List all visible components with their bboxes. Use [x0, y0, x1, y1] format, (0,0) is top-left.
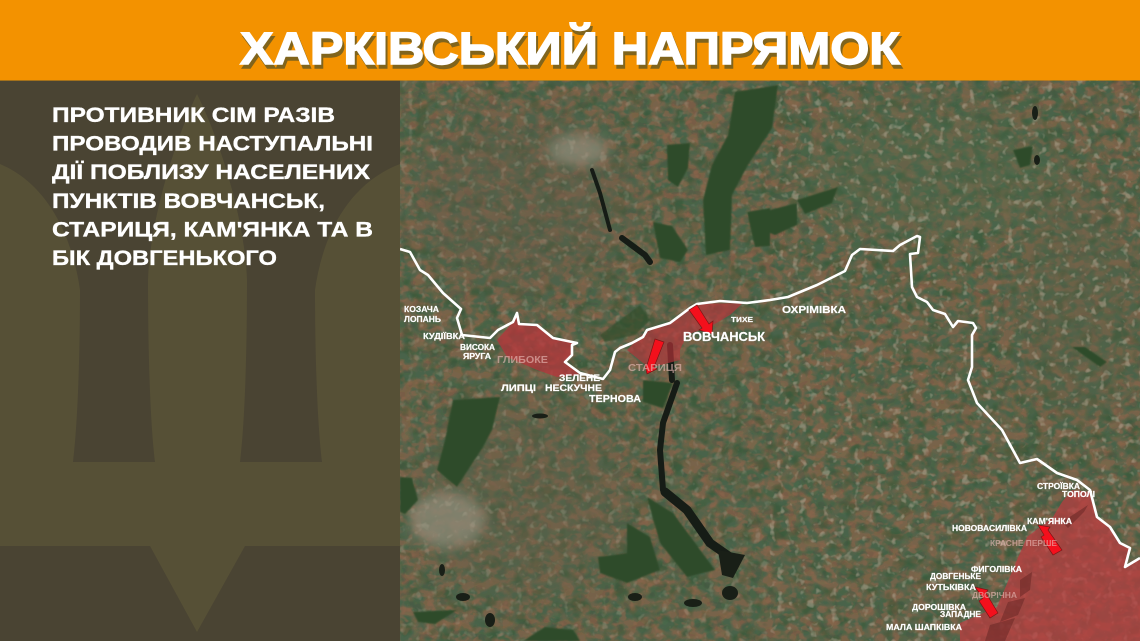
arrow: Vovchansk attack — [689, 305, 713, 334]
settlement labels: КОЗАЧА — [404, 305, 439, 314]
settlement labels: НОВОВАСИЛІВКА — [952, 523, 1027, 533]
title: ХАРКІВСЬКИЙ НАПРЯМОК — [242, 27, 903, 78]
front line — [400, 236, 1140, 567]
settlement labels: ТОПОЛІ — [1062, 490, 1095, 499]
occupied area: Vovchansk and Starytsia — [627, 303, 743, 367]
panel body text: ПРОВОДИВ НАСТУПАЛЬНІ — [52, 132, 373, 156]
settlement labels: ВОВЧАНСЬК — [683, 329, 765, 344]
arrow: Dvorichna attack — [975, 587, 998, 618]
panel: left text panel with trident — [0, 80, 400, 641]
settlement labels: ДВОРІЧНА — [972, 590, 1017, 600]
arrow: Kamianka attack — [1038, 525, 1062, 555]
settlement labels: НЕСКУЧНЕ — [545, 383, 602, 394]
settlement labels: ГЛИБОКЕ — [497, 355, 548, 366]
forests — [400, 85, 1107, 641]
occupied area: Kamianka to Dvorichna — [960, 490, 1140, 641]
settlement labels: КАМ'ЯНКА — [1027, 516, 1072, 526]
panel body text — [52, 104, 373, 270]
panel body text: ПРОТИВНИК СІМ РАЗІВ — [52, 104, 335, 127]
settlement labels: КУТЬКІВКА — [926, 582, 976, 592]
settlement labels: ЗЕЛЕНЕ — [559, 373, 600, 384]
settlement labels: ДОРОШІВКА — [912, 602, 966, 612]
settlement labels: ЛИПЦІ — [501, 383, 536, 394]
settlement labels: СТАРИЦЯ — [628, 363, 682, 374]
settlement labels: ДОВГЕНЬКЕ — [930, 571, 981, 581]
header bar — [0, 0, 1140, 80]
rivers and reservoirs — [592, 170, 730, 557]
settlement labels: ТЕРНОВА — [589, 393, 641, 405]
settlement labels: ВИСОКА — [460, 343, 495, 352]
settlement labels: ТИХЕ — [731, 315, 753, 324]
settlement labels: ОХРІМІВКА — [782, 305, 846, 316]
occupied area: Hlyboke — [497, 313, 580, 377]
cities — [409, 134, 608, 548]
panel body text: СТАРИЦЯ, КАМ'ЯНКА ТА В — [52, 218, 373, 242]
settlement labels: ЗАПАДНЕ — [940, 609, 981, 619]
settlement labels: ФИГОЛІВКА — [971, 564, 1022, 574]
panel body text: ПУНКТІВ ВОВЧАНСЬК, — [52, 190, 325, 213]
map background — [400, 80, 1140, 641]
arrow: Starytsia attack — [645, 339, 664, 374]
settlement labels: ЯРУГА — [463, 352, 491, 361]
settlement labels: СТРОЇВКА — [1037, 482, 1080, 491]
settlement labels — [404, 305, 1095, 632]
panel body text: ДІЇ ПОБЛИЗУ НАСЕЛЕНИХ — [52, 161, 370, 184]
panel body text: БІК ДОВГЕНЬКОГО — [52, 247, 277, 270]
settlement labels: ЛОПАНЬ — [404, 315, 441, 324]
settlement labels: КРАСНЕ ПЕРШЕ — [990, 538, 1057, 548]
settlement labels: МАЛА ШАПКІВКА — [886, 622, 962, 632]
title: ХАРКІВСЬКИЙ НАПРЯМОК — [240, 23, 901, 74]
settlement labels: КУДІЇВКА — [423, 332, 465, 341]
